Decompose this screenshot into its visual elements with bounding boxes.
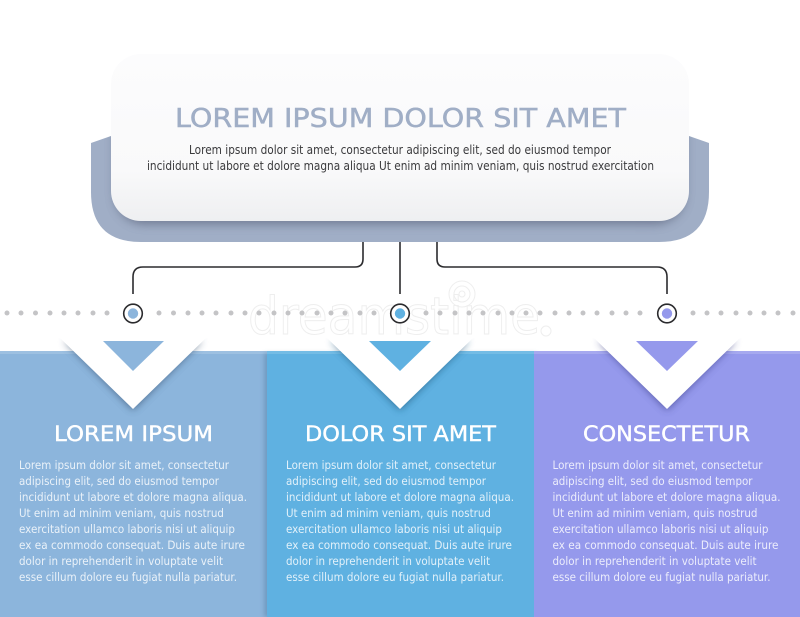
intro text: incididunt ut labore et dolore magna aliqua Ut enim ad minim veniam, quis nostrud exercitation xyxy=(147,159,654,173)
panel body text: esse cillum dolore eu fugiat nulla pariatur. xyxy=(552,570,770,584)
panel: lorem ipsum xyxy=(0,338,267,617)
chevron inner triangle xyxy=(636,341,698,371)
panel body text: Ut enim ad minim veniam, quis nostrud xyxy=(552,506,758,520)
panel body text: incididunt ut labore et dolore magna aliqua. xyxy=(552,490,780,504)
panel background xyxy=(267,351,534,617)
panel body text: Ut enim ad minim veniam, quis nostrud xyxy=(286,506,491,520)
dotted timeline xyxy=(4,310,796,316)
white chevron xyxy=(60,338,206,409)
panel body text: Lorem ipsum dolor sit amet, consectetur xyxy=(552,458,763,472)
panel body text: esse cillum dolore eu fugiat nulla pariatur. xyxy=(19,570,237,584)
panel body text xyxy=(286,458,514,584)
panel background xyxy=(0,351,267,617)
panel body text: exercitation ullamco laboris nisi ut aliquip xyxy=(552,522,768,536)
card shadow on band xyxy=(110,136,690,230)
panel body text: ex ea commodo consequat. Duis aute irure xyxy=(19,538,245,552)
panel shadow xyxy=(264,353,537,617)
header panel xyxy=(91,108,709,242)
node: left xyxy=(124,304,142,323)
node: right xyxy=(658,304,676,323)
panel body text: esse cillum dolore eu fugiat nulla pariatur. xyxy=(286,570,504,584)
node: centre xyxy=(391,304,409,323)
panel body text: adipiscing elit, sed do eiusmod tempor xyxy=(286,474,486,488)
white chevron xyxy=(327,338,473,409)
chevron inner triangle xyxy=(369,341,431,371)
intro text xyxy=(147,143,654,173)
chevron inner triangle xyxy=(103,341,164,371)
connector lines xyxy=(133,242,667,294)
main title: LOREM IPSUM DOLOR SIT AMET xyxy=(175,104,626,134)
chevron shadow xyxy=(598,341,736,410)
panel background xyxy=(534,351,800,617)
panel body text xyxy=(552,458,780,584)
chevron shadow xyxy=(331,341,469,410)
white chevron xyxy=(594,338,740,409)
header card xyxy=(111,54,689,221)
panel body text: incididunt ut labore et dolore magna aliqua. xyxy=(19,490,247,504)
panel body text: exercitation ullamco laboris nisi ut aliquip xyxy=(286,522,502,536)
panel body text xyxy=(19,458,247,584)
watermark: dreamstime xyxy=(248,287,540,347)
panel body text: dolor in reprehenderit in voluptate velit xyxy=(19,554,223,568)
intro text: Lorem ipsum dolor sit amet, consectetur adipiscing elit, sed do eiusmod tempor xyxy=(189,143,611,157)
panel body text: Lorem ipsum dolor sit amet, consectetur xyxy=(286,458,496,472)
panel heading: DOLOR SIT AMET xyxy=(305,422,496,446)
panel: consectetur xyxy=(534,338,800,617)
panel heading: CONSECTETUR xyxy=(583,422,750,446)
panel body text: adipiscing elit, sed do eiusmod tempor xyxy=(19,474,219,488)
panel body text: Ut enim ad minim veniam, quis nostrud xyxy=(19,506,224,520)
panel: dolor sit amet xyxy=(264,338,537,617)
panel body text: Lorem ipsum dolor sit amet, consectetur xyxy=(19,458,229,472)
chevron shadow xyxy=(64,341,202,410)
panel body text: exercitation ullamco laboris nisi ut aliquip xyxy=(19,522,235,536)
panel heading: LOREM IPSUM xyxy=(54,422,213,446)
panel body text: adipiscing elit, sed do eiusmod tempor xyxy=(552,474,753,488)
panel body text: dolor in reprehenderit in voluptate velit xyxy=(286,554,490,568)
panel body text: ex ea commodo consequat. Duis aute irure xyxy=(552,538,778,552)
panel body text: dolor in reprehenderit in voluptate velit xyxy=(552,554,757,568)
panel body text: incididunt ut labore et dolore magna aliqua. xyxy=(286,490,514,504)
panel body text: ex ea commodo consequat. Duis aute irure xyxy=(286,538,512,552)
back band xyxy=(91,136,709,242)
